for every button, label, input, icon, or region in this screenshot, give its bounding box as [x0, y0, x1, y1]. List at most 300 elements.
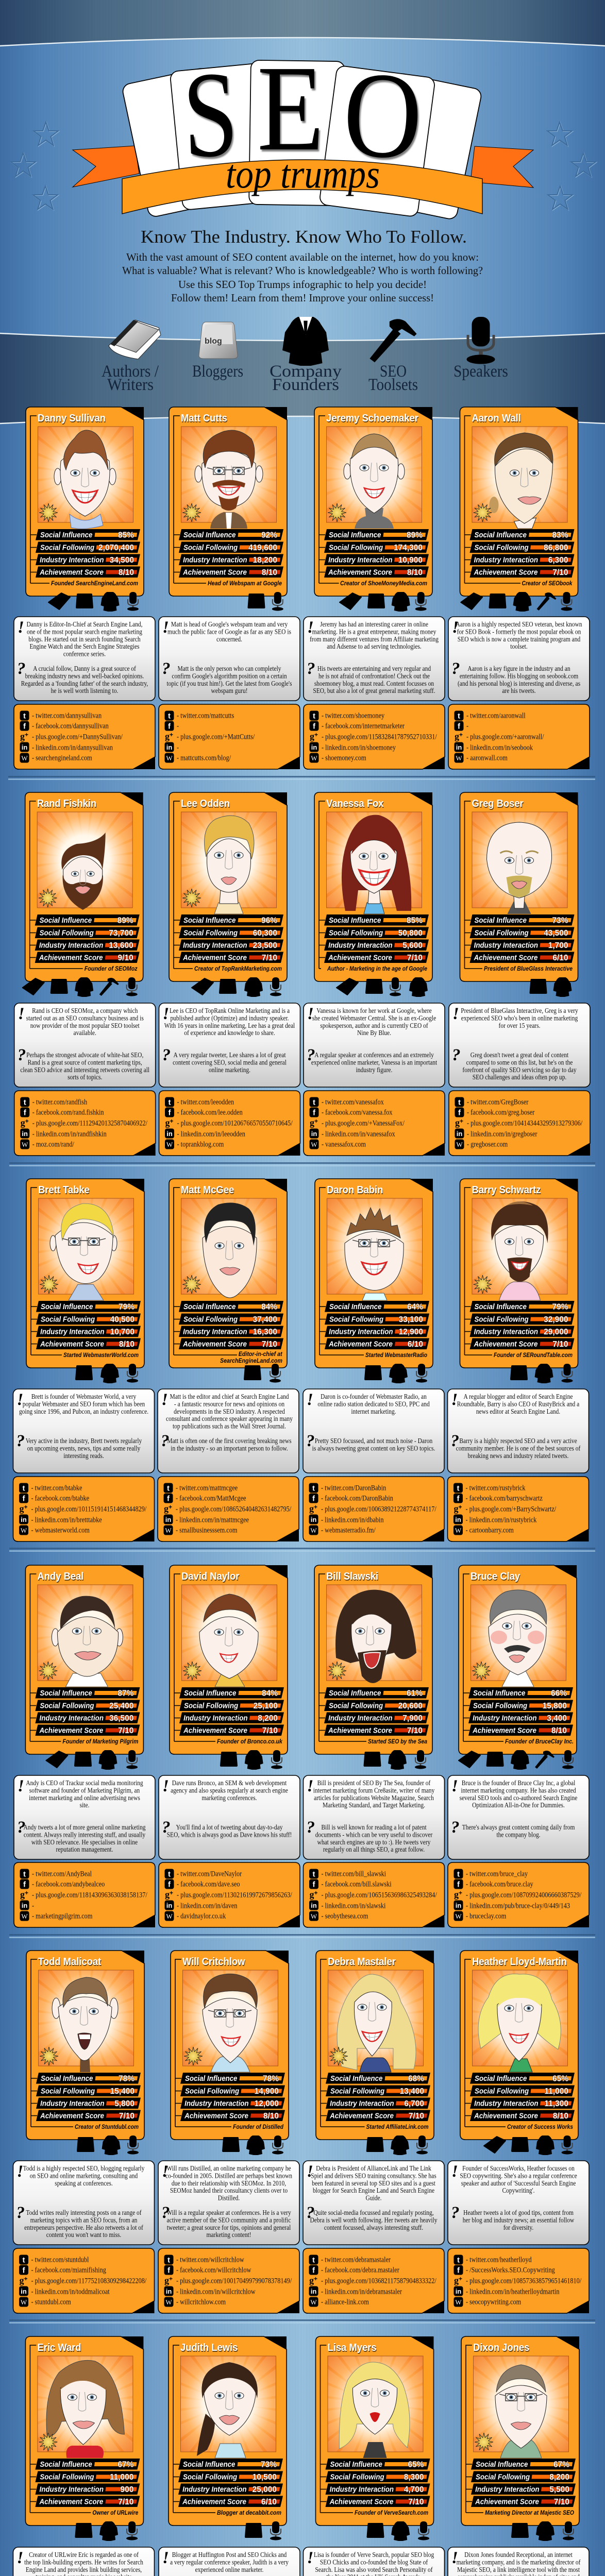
role icons	[23, 977, 138, 997]
bio panel: Barry Schwartz: Roundtable, Barry is also CEO of RustyBrick and a	[457, 1400, 580, 1408]
stats: Achievement Score	[474, 2111, 538, 2120]
bio panel: Lee Odden: A very regular tweeter, Lee shares a lot of great	[173, 1051, 286, 1059]
stats: 7/10	[407, 1726, 423, 1735]
links panel: Vanessa Fox: - facebook.com/vanessa.fox	[322, 1108, 393, 1116]
stats	[39, 1688, 134, 1735]
tagline: Founder of Marketing Pilgrim	[62, 1739, 138, 1745]
stats: Social Following	[329, 1701, 383, 1710]
bio panel: Matt McGee: in the industry - so an important person to follow.	[171, 1444, 288, 1452]
bio panel: Matt Cutts: webspam guru!	[211, 687, 248, 694]
stats	[328, 916, 423, 962]
role icons	[510, 1364, 573, 1383]
links panel: Barry Schwartz: - linkedin.com/in/rustybrick	[466, 1515, 537, 1524]
bio panel: Todd Malicoat: entrepeneurs perspective. He also retweets a lot of	[24, 2224, 144, 2231]
bio panel: Greg Boser: experienced SEO who's been in online marketing	[461, 1014, 578, 1022]
links panel: Aaron Wall	[448, 704, 590, 769]
category labels	[102, 362, 508, 394]
links panel: Andy Beal: - plus.google.com/118143096363038158137/	[32, 1890, 147, 1899]
bio panel: Matt McGee	[158, 1389, 299, 1473]
bio panel: Will Critchlow: marketing content!	[207, 2231, 251, 2239]
stats: 1,700	[548, 941, 568, 950]
links panel: Brett Tabke: - twitter.com/btabke	[31, 1483, 82, 1492]
stats: Industry Interaction	[183, 941, 247, 950]
links panel: Matt Cutts: -	[177, 743, 179, 752]
card: Bruce Clay	[425, 1538, 605, 1770]
stats: Achievement Score	[39, 1726, 104, 1735]
bio panel: Judith Lewis: experienced online marketer.	[195, 2566, 263, 2573]
bio panel: Lee Odden: Lee is CEO of TopRank Online Marketing and is a	[170, 1007, 290, 1014]
stats: 78%	[263, 2074, 279, 2083]
stats: Social Influence	[183, 1302, 236, 1311]
portrait	[52, 1977, 118, 2072]
name: Brett Tabke	[38, 1184, 90, 1196]
bio panel: Greg Boser: for over 15 years.	[499, 1022, 540, 1029]
name: Todd Malicoat	[38, 1956, 102, 1968]
bio panel: Debra Mastaler: Debra is President of AllianceLink and The Link	[316, 2164, 431, 2172]
portrait	[486, 822, 552, 914]
links panel: Andy Beal: - twitter.com/AndyBeal	[32, 1869, 92, 1878]
stats: 900	[121, 2485, 133, 2494]
bio panel: Dixon Jones: Majestic SEO, a link intelligence tool with the most	[457, 2566, 580, 2573]
bio panel: Jeremy Schoemaker: shoemoney blog, a must read. Content focusses on	[314, 680, 434, 687]
bio panel: Daron Babin: Pretty SEO focussed, and not much noise - Daron	[315, 1437, 433, 1445]
stats	[40, 2074, 135, 2121]
stats: Social Following	[185, 2087, 240, 2095]
card: Daron Babin	[281, 1152, 468, 1383]
links panel: Barry Schwartz: - twitter.com/rustybrick	[466, 1483, 526, 1492]
stats: 61%	[407, 1689, 423, 1698]
bio panel: Matt McGee: top publications such as the Wall Street Journal.	[173, 1422, 286, 1430]
bio panel: Lee Odden	[159, 1003, 300, 1087]
links panel: Todd Malicoat	[13, 2248, 155, 2313]
bio panel: Vanessa Fox: spokesperson, author and is currently CEO of	[320, 1022, 428, 1029]
stats: 7/10	[262, 1726, 278, 1735]
links panel: Will Critchlow	[158, 2248, 299, 2313]
links panel: Daron Babin: - linkedin.com/in/dbabin	[321, 1515, 384, 1524]
stats: 15,800	[543, 1702, 567, 1710]
stats: Social Following	[329, 543, 383, 552]
name: Rand Fishkin	[37, 798, 96, 809]
bio panel: Will Critchlow: tweeter; a great source for tips, opinions and general	[167, 2224, 291, 2231]
stats: 14,900	[255, 2087, 279, 2096]
stats: 67%	[553, 2461, 569, 2469]
stats: Industry Interaction	[40, 1714, 104, 1722]
links panel: Bruce Clay: - twitter.com/bruce_clay	[466, 1869, 528, 1878]
links panel: Vanessa Fox: - vanessafox.com	[322, 1140, 366, 1148]
stats	[474, 1302, 568, 1349]
bio panel: Will Critchlow: Will is a regular speaker at conferences. He is a very	[166, 2209, 291, 2216]
stats: Social Following	[329, 1315, 384, 1324]
bio panel: Rand Fishkin	[14, 1003, 156, 1087]
bio panel: Bruce Clay	[448, 1775, 589, 1859]
tagline: SearchEngineLand.com	[220, 1358, 282, 1364]
stats: 85%	[407, 916, 423, 925]
links panel: Will Critchlow: - linkedin.com/in/willcritchlow	[176, 2287, 256, 2296]
card: Rand Fishkin	[0, 766, 179, 997]
stats: Social Following	[183, 543, 238, 552]
stats: 7,900	[402, 1714, 423, 1723]
links panel: Matt McGee: - smallbusinesssem.com	[176, 1526, 238, 1534]
stats: 84%	[262, 1689, 278, 1698]
name: Greg Boser	[472, 798, 524, 809]
role icons	[337, 977, 428, 997]
role icons	[459, 1750, 574, 1770]
bio panel: Vanessa Fox: A regular speaker at conferences and an extremely	[314, 1051, 434, 1059]
bio panel: Debra Mastaler	[303, 2161, 444, 2245]
stats: 34,500	[110, 556, 134, 565]
links panel: Debra Mastaler: - twitter.com/debramastaler	[321, 2255, 391, 2264]
stats: 83%	[552, 531, 568, 540]
card: Jeremy Schoemaker	[280, 380, 468, 612]
bio panel: Andy Beal: site.	[80, 1801, 89, 1809]
bio panel: Jeremy Schoemaker: Jeremy has had an interesting career in online	[320, 620, 428, 628]
role icons	[511, 2521, 574, 2541]
links panel: David Naylor: - twitter.com/DaveNaylor	[177, 1869, 242, 1878]
bio panel: Vanessa Fox: experienced online marketer, Vanessa is an important	[311, 1058, 438, 1066]
stats: Achievement Score	[40, 1340, 104, 1348]
stats: Social Influence	[476, 2460, 528, 2468]
stats: 89%	[117, 916, 133, 925]
stats: Achievement Score	[182, 953, 247, 962]
bio panel: Will Critchlow: due to their relationship with SEOMoz. In 2010,	[172, 2179, 286, 2187]
tagline: Started WebmasterWorld.com	[63, 1352, 139, 1359]
links panel: Will Critchlow: - facebook.com/willcritchlow	[176, 2265, 251, 2274]
icon: hammer	[369, 319, 417, 362]
stats: Achievement Score	[472, 1726, 536, 1735]
stats: 8,200	[549, 2473, 569, 2482]
role icons	[530, 977, 572, 997]
bio panel: Bill Slawski: Marketing Standard, and Target Marketing.	[323, 1801, 425, 1809]
portrait	[491, 1201, 548, 1300]
bio panel: Andy Beal: content. Always really interesting stuff, and usually	[24, 1831, 146, 1839]
bio panel: Andy Beal: internet marketing and online advertising news	[29, 1794, 140, 1802]
tagline: Founder of SEOMoz	[85, 966, 138, 972]
name: Danny Sullivan	[38, 413, 106, 424]
stats: Social Influence	[41, 2074, 93, 2082]
bio panel: Aaron Wall: toolset.	[510, 642, 528, 650]
bio panel: Bill Slawski: internet marketing forum Cre8asite, writer of many	[313, 1786, 435, 1794]
bio panel: Eric Ward	[13, 2547, 155, 2576]
links panel: Heather Lloyd-Martin: - plus.google.com/108573638579651461810/	[466, 2276, 581, 2285]
bio panel: Debra Mastaler: Spiel and delivers SEO training consultancy. She has	[311, 2172, 436, 2180]
bio panel: Judith Lewis	[159, 2547, 300, 2576]
card: Todd Malicoat	[0, 1924, 180, 2155]
links panel: Matt Cutts: - plus.google.com/+MattCutts/	[177, 732, 255, 741]
name: Matt Cutts	[181, 413, 227, 424]
name: Lisa Myers	[328, 2342, 377, 2353]
stats	[474, 530, 568, 577]
links panel: Greg Boser: - twitter.com/GregBoser	[467, 1097, 529, 1106]
stats: Social Following	[474, 928, 529, 937]
bio panel: Bill Slawski: what search engines are up to :). He tweets very	[317, 1838, 431, 1846]
stats: 6,300	[548, 556, 568, 565]
links panel: Aaron Wall: - twitter.com/aaronwall	[466, 711, 526, 720]
portrait	[495, 2365, 547, 2458]
bio panel: Lisa Myers: Search. Lisa was also voted Search Personality of	[315, 2566, 433, 2573]
category labels: Bloggers	[192, 362, 243, 381]
tagline: Creator of Stuntdubl.com	[75, 2124, 139, 2130]
bio panel: Matt Cutts: Matt is the only person who can completely	[177, 665, 281, 672]
stats: Social Influence	[184, 1688, 237, 1697]
links panel: Heather Lloyd-Martin: - twitter.com/heatherlloyd	[466, 2255, 532, 2264]
name: Matt McGee	[181, 1184, 234, 1196]
bio panel: Bill Slawski	[303, 1775, 444, 1859]
links panel: Jeremy Schoemaker: - plus.google.com/115832841787952710331/	[322, 732, 437, 741]
bio panel: Danny Sullivan: Regarded as a 'founding father' of the search industry,	[21, 680, 148, 687]
tagline: President of BlueGlass Interactive	[484, 966, 573, 972]
stats: Social Influence	[474, 916, 527, 924]
bio panel: Brett Tabke: Brett is founder of Webmaster World, a very	[31, 1393, 137, 1400]
bio panel: Heather Lloyd-Martin: her blog and industry news; an essential follow	[463, 2216, 575, 2224]
links panel: Daron Babin: - facebook.com/DaronBabin	[321, 1494, 393, 1502]
bio panel: Barry Schwartz	[447, 1389, 589, 1473]
bio panel: Todd Malicoat: Todd is a highly respected SEO, blogging regularly	[23, 2164, 145, 2172]
links panel: Lee Odden	[159, 1091, 300, 1156]
stats: 73%	[261, 2461, 277, 2469]
links panel: Matt McGee: - twitter.com/mattmcgee	[176, 1483, 238, 1492]
tagline: Founder of Distilled	[233, 2124, 284, 2130]
name: Eric Ward	[37, 2342, 81, 2353]
portrait	[61, 833, 106, 910]
stats: 11,300	[544, 2099, 568, 2108]
stats: Social Influence	[329, 530, 381, 539]
name: Daron Babin	[327, 1184, 383, 1196]
intro text: What is valuable? What is relevant? Who is knowledgeable? Who is worth following?	[122, 264, 483, 277]
bio panel: Todd Malicoat: Todd writes really interesting posts on a range of	[26, 2209, 142, 2216]
links panel: Heather Lloyd-Martin: - seocopywriting.com	[466, 2297, 521, 2306]
role icons	[367, 2521, 429, 2541]
bio panel: Judith Lewis: a very regular conference speaker, Judith is a very	[170, 2558, 289, 2566]
bio panel: Vanessa Fox	[304, 1003, 445, 1087]
stats: Social Following	[183, 1315, 238, 1324]
stats: Social Following	[41, 2087, 95, 2095]
stats: 20,600	[398, 1702, 423, 1710]
bio panel: Vanessa Fox: industry figure.	[356, 1066, 392, 1074]
decorative stars right	[547, 122, 596, 210]
stats: 86,800	[544, 544, 568, 552]
tagline: Author - Marketing in the age of Google	[327, 966, 428, 972]
portrait	[490, 433, 553, 529]
stats: Industry Interaction	[184, 2099, 249, 2108]
card: Aaron Wall	[426, 380, 605, 612]
role icons	[75, 2521, 138, 2541]
bio panel: Heather Lloyd-Martin: speaker and author of 'Successful Search Engine	[461, 2179, 576, 2187]
stats: 15,400	[110, 2087, 135, 2096]
bio panel: Aaron Wall: for SEO Book - formerly the most popular ebook on	[457, 628, 581, 636]
stats: 33,100	[399, 1315, 423, 1324]
stats	[328, 1302, 423, 1349]
stats: Social Following	[183, 928, 238, 937]
tagline: Editor-in-chief at	[239, 1351, 283, 1358]
stats: Social Influence	[474, 1302, 527, 1311]
stats: Social Following	[183, 2472, 238, 2481]
bio panel: Debra Mastaler: Quite social-media focussed and regularly posting,	[313, 2209, 434, 2216]
card: Eric Ward	[0, 2310, 179, 2541]
bio panel: Lee Odden: published author (Optimize) and industry speaker.	[170, 1014, 289, 1022]
bio panel: Bruce Clay: several SEO tools and co-authored Search Engine	[460, 1794, 578, 1802]
stats: Social Influence	[183, 530, 236, 539]
stats: 419,600	[248, 544, 277, 552]
category labels: Speakers	[453, 362, 508, 381]
links panel: Bill Slawski: - twitter.com/bill_slawski	[322, 1869, 386, 1878]
links panel: Rand Fishkin: - plus.google.com/111294201325870406922/	[32, 1118, 147, 1127]
stats: 18,200	[253, 556, 277, 565]
stats: 92%	[261, 531, 277, 540]
bio panel: David Naylor: agency and also speaks regularly at search engine	[171, 1786, 288, 1794]
bio panel: Aaron Wall: SEO which is now a complete training program and	[458, 635, 581, 643]
icon: book	[109, 320, 161, 359]
stats: 7/10	[552, 1340, 568, 1349]
title logo: SEO top trumps: S	[181, 46, 240, 183]
stats: 8/10	[262, 568, 277, 577]
bio panel: Bruce Clay: Optimization All-in-One for Dummies.	[472, 1801, 565, 1809]
stats: Social Following	[40, 2472, 94, 2481]
bio panel: Heather Lloyd-Martin: for diversity.	[503, 2224, 533, 2231]
bio panel: Brett Tabke: going since 1996, and Pubcon, an industry conference.	[19, 1408, 148, 1415]
stats: 7/10	[407, 954, 423, 962]
bio panel: Bruce Clay: internet marketing company. He has also created	[461, 1786, 576, 1794]
stats: Achievement Score	[474, 1340, 538, 1348]
links panel: Danny Sullivan: - plus.google.com/+DannySullivan/	[32, 732, 123, 741]
bio panel: Will Critchlow: Will runs Distilled, an online marketing company he	[166, 2164, 291, 2172]
links panel: Vanessa Fox	[304, 1091, 445, 1156]
name: Lee Odden	[181, 798, 230, 809]
name: Judith Lewis	[180, 2342, 238, 2353]
links panel: Bruce Clay: - plus.google.com/108709924006660387529/	[466, 1890, 581, 1899]
tagline: Head of Webspam at Google	[208, 581, 282, 587]
bio panel: Bruce Clay: Bruce is the founder of Bruce Clay Inc, a global	[462, 1779, 576, 1787]
stats: 79%	[119, 1302, 135, 1312]
stats	[329, 2074, 424, 2121]
links panel: Bruce Clay	[448, 1862, 589, 1927]
stats: 6/10	[408, 1340, 423, 1349]
bio panel: Judith Lewis: Blogger at Huffington Post and SEO Chicks and	[172, 2551, 287, 2558]
links panel: Greg Boser: - linkedin.com/in/gregboser	[467, 1129, 537, 1138]
stats: 9/10	[118, 954, 133, 962]
stats: 5,800	[114, 2099, 135, 2108]
stats: Achievement Score	[40, 2111, 104, 2120]
bio panel: Danny Sullivan	[14, 617, 155, 701]
bio panel: Debra Mastaler: blogger for Search Engine Land and Search Engine	[313, 2187, 434, 2194]
links panel: Matt McGee: - linkedin.com/in/mattmcgee	[176, 1515, 249, 1524]
stats: 4,700	[404, 2485, 424, 2494]
stats	[475, 2460, 569, 2506]
stats: 68%	[408, 2074, 424, 2083]
tagline: Founder of SERoundTable.com	[494, 1352, 573, 1359]
stats: Industry Interaction	[183, 1327, 247, 1336]
card: Brett Tabke	[0, 1152, 180, 1383]
stats: Social Following	[476, 2472, 530, 2481]
stats: 7/10	[119, 2112, 135, 2121]
portrait	[199, 1594, 258, 1687]
stats	[183, 1688, 278, 1735]
stats: Achievement Score	[39, 2497, 104, 2506]
links panel: Lee Odden: - twitter.com/leeodden	[177, 1097, 234, 1106]
stats: Achievement Score	[182, 2497, 246, 2506]
tagline: Founder of Bronco.co.uk	[217, 1739, 283, 1745]
stats: Industry Interaction	[40, 1327, 105, 1336]
name: Bill Slawski	[326, 1571, 378, 1582]
links panel: Bruce Clay: - linkedin.com/pub/bruce-clay/0/449/143	[466, 1901, 570, 1910]
bio panel: Daron Babin	[303, 1389, 444, 1473]
stats	[39, 916, 133, 962]
links panel: Brett Tabke	[13, 1477, 155, 1541]
links panel: Aaron Wall: - linkedin.com/in/seobook	[466, 743, 533, 752]
links panel: Todd Malicoat: - stuntdubl.com	[31, 2297, 71, 2306]
stats: Social Influence	[40, 530, 93, 539]
role icons	[366, 2136, 428, 2155]
bio panel: Danny Sullivan: conference series.	[63, 650, 106, 658]
stats: 7/10	[262, 1340, 277, 1349]
links panel: Todd Malicoat: - plus.google.com/117752108309298422208/	[31, 2276, 146, 2285]
bio panel: Matt McGee: - a fantastic resource for news and opinions on	[174, 1400, 285, 1408]
stats: Achievement Score	[39, 953, 103, 962]
bio panel: Brett Tabke: on upcoming events, news, tips and some really	[27, 1444, 141, 1452]
card: Vanessa Fox	[280, 766, 468, 997]
category labels: Writers	[107, 376, 154, 394]
stats: Social Following	[473, 1701, 528, 1710]
bio panel: Dixon Jones	[448, 2547, 589, 2576]
stats: Social Influence	[329, 1302, 382, 1311]
stats: 66%	[551, 1689, 567, 1698]
stats: Social Following	[40, 928, 94, 937]
tagline: Started AffiliateLink.com	[366, 2124, 429, 2130]
links panel: Rand Fishkin: - moz.com/rand/	[32, 1140, 74, 1148]
links panel: Vanessa Fox: - plus.google.com/+VanessaFox/	[322, 1118, 405, 1127]
bio panel: Todd Malicoat: speaking at conferences.	[55, 2179, 113, 2187]
stats: 37,400	[253, 1315, 277, 1324]
bio panel: Daron Babin: Daron is co-founder of Webmaster Radio, an	[321, 1393, 427, 1400]
stats: 7/10	[552, 568, 568, 577]
role icons	[244, 1364, 281, 1383]
stats: 5,600	[402, 941, 423, 950]
stats: Social Influence	[185, 2074, 238, 2082]
stats: 7/10	[408, 2498, 424, 2506]
links panel: Barry Schwartz: - facebook.com/barryschwartz	[466, 1494, 543, 1502]
intro text: With the vast amount of SEO content available on the internet, how do you know:	[126, 251, 479, 263]
stats: Industry Interaction	[474, 2099, 539, 2108]
links panel: David Naylor	[159, 1862, 300, 1927]
links panel: Jeremy Schoemaker: - facebook.com/internetmarketer	[322, 721, 405, 730]
name: Jeremy Schoemaker	[326, 413, 418, 424]
stats: 6/10	[261, 2498, 277, 2506]
stats	[474, 916, 568, 962]
stats: Social Following	[40, 543, 95, 552]
stats: Industry Interaction	[328, 555, 393, 564]
links panel: Barry Schwartz	[447, 1477, 589, 1541]
stats: Industry Interaction	[328, 941, 393, 950]
stats: 7/10	[118, 2498, 133, 2506]
bio panel: Aaron Wall: Aaron is a highly respected SEO veteran, best known	[456, 620, 582, 628]
links panel: Daron Babin: - plus.google.com/100638921228774374117/	[321, 1504, 436, 1513]
stats: Industry Interaction	[330, 2099, 394, 2108]
bio panel: Dixon Jones: marketing company, and is the marketing director of	[457, 2558, 581, 2566]
links panel: David Naylor: - facebook.com/dave.seo	[177, 1879, 240, 1888]
stats: 29,000	[544, 1328, 568, 1336]
stats: 16,300	[253, 1328, 277, 1336]
links panel: Rand Fishkin: - twitter.com/randfish	[32, 1097, 87, 1106]
links panel: Heather Lloyd-Martin: - linkedin.com/in/heatherlloydmartin	[466, 2287, 560, 2296]
bio panel: Andy Beal	[14, 1775, 155, 1859]
bio panel: Aaron Wall: are his tweets.	[502, 687, 536, 694]
portrait	[339, 2362, 410, 2458]
tagline: Started WebmasterRadio	[365, 1352, 427, 1359]
stats: Social Influence	[329, 916, 381, 924]
card: Barry Schwartz	[426, 1152, 605, 1383]
card: Lee Odden	[135, 766, 323, 997]
bio panel: Will Critchlow: Distilled.	[218, 2194, 240, 2202]
links panel: Greg Boser: - gregboser.com	[467, 1140, 508, 1148]
